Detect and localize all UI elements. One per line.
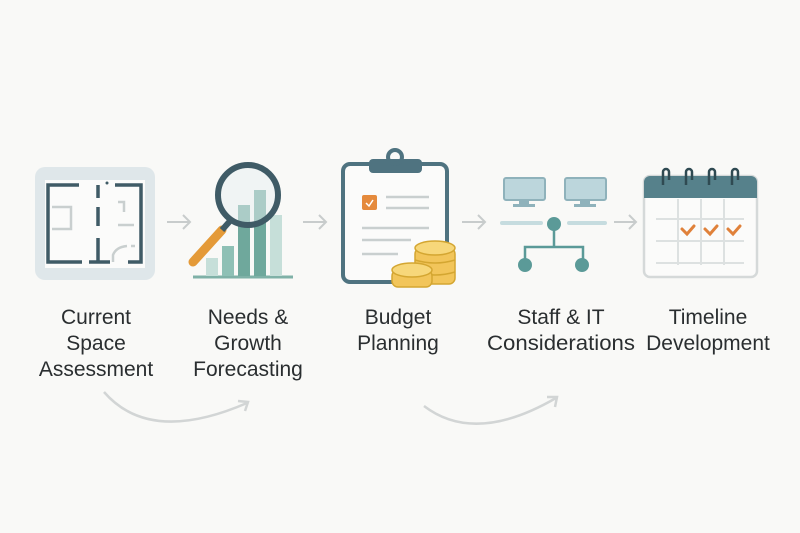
icon: growth chart with magnifier [193,165,293,277]
label: Needs & Growth Forecasting: Forecasting [193,358,303,381]
icon: clipboard with coins [343,150,455,287]
icon: floor plan [35,167,155,280]
label: Current Space Assessment: Current [61,306,131,329]
icon: network computers [500,178,607,272]
label: Timeline Development: Development [646,332,770,355]
label: Budget Planning: Planning [357,332,439,355]
curved arrow 2 [424,397,557,424]
arrow 1 [167,215,190,229]
icon: calendar [644,169,757,277]
curved arrow 1 [104,392,248,422]
arrow 4 [614,215,636,229]
arrow 2 [303,215,326,229]
arrow 3 [462,215,485,229]
label: Needs & Growth Forecasting: Growth [214,332,282,355]
label: Needs & Growth Forecasting: Needs & [208,306,288,329]
label: Budget Planning: Budget [365,306,431,329]
label: Staff & IT Considerations: Considerations [487,332,635,355]
label: Current Space Assessment: Space [66,332,126,355]
label: Current Space Assessment: Assessment [39,358,153,381]
label: Staff & IT Considerations: Staff & IT [517,306,605,329]
label: Timeline Development: Timeline [669,306,747,329]
